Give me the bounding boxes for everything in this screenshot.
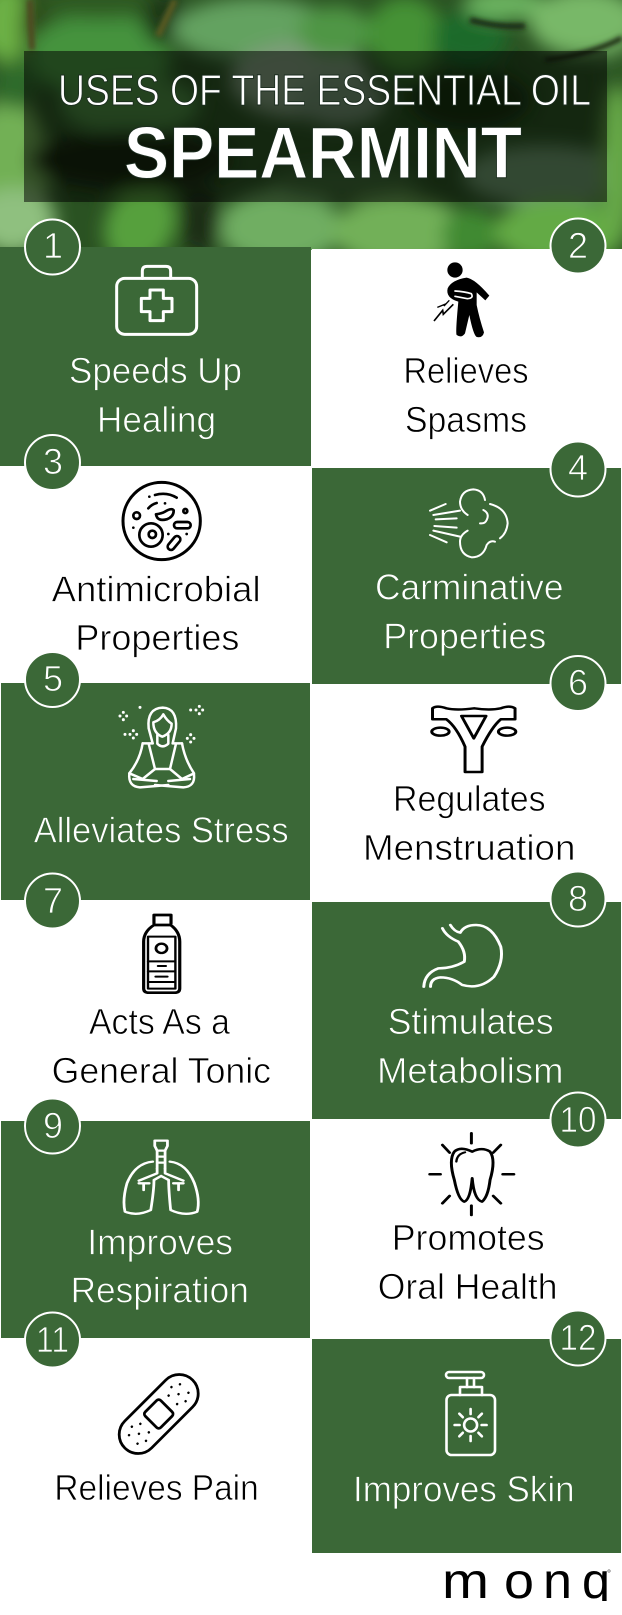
panel 9: improves respiration [1,1098,310,1338]
icon: gas cloud [430,489,508,557]
icon: tonic bottle [144,915,180,993]
label: Healing [97,399,216,440]
panel 4: carminative properties [312,442,621,684]
label: Promotes [392,1217,545,1258]
number badge 6 [550,656,606,711]
number badge 9: 9 [43,1105,63,1146]
number badge 8: 8 [568,878,588,919]
panel 6: regulates menstruation [312,656,622,902]
label: Oral Health [378,1266,558,1307]
label: General Tonic [52,1050,271,1091]
panel 3: antimicrobial properties [0,435,311,683]
icon: shining tooth [430,1133,514,1215]
label [52,569,261,658]
logo: monq: m [442,1553,489,1609]
panel background [312,468,621,684]
number badge 12: 12 [560,1317,596,1358]
label: Acts As a [89,1001,231,1042]
number badge 7: 7 [43,880,63,921]
label [363,778,575,868]
number badge 5 [25,652,80,707]
number badge 3 [25,435,80,490]
number badge 4: 4 [568,447,588,488]
icon: woman meditating [120,706,203,787]
panel 11: relieves pain [0,1312,311,1553]
panel background [312,1339,621,1553]
title panel: translucent dark box [24,51,607,202]
label: Properties [383,616,546,657]
label: Relieves Pain [54,1467,259,1508]
title line: spearmint: SPEARMINT [124,113,522,194]
panel 1: speeds up healing [0,220,311,466]
panel 10: promotes oral health [312,1092,622,1339]
label: Respiration [71,1270,249,1311]
panel background [312,902,621,1119]
label [404,350,528,440]
number badge 6: 6 [568,662,588,703]
number badge 11 [25,1312,80,1368]
label: Properties [75,617,239,658]
label [52,1001,271,1091]
panel background [0,466,311,683]
logo: monq: q [582,1553,610,1609]
number badge 10 [550,1092,606,1148]
header: spearmint leaves photo with title [0,0,622,250]
label: Alleviates Stress [34,810,289,851]
logo: monq [446,1570,610,1601]
label: Menstruation [363,827,575,868]
number badge 4 [550,442,606,496]
number badge 5: 5 [43,658,63,699]
label [69,350,242,440]
label: Improves Skin [353,1469,575,1510]
panel background [1,683,310,900]
number badge 9 [25,1098,80,1154]
label: Speeds Up [69,350,242,391]
number badge 1: 1 [43,225,63,266]
label: Antimicrobial [52,569,261,610]
icon: lungs [124,1141,198,1214]
label: Carminative [375,566,564,607]
panel background [1,1121,310,1338]
icon: uterus [432,707,516,772]
label [375,566,564,657]
number badge 12 [550,1310,606,1366]
label [377,1001,564,1091]
panel background [312,1119,622,1339]
label: Improves [87,1221,233,1262]
label: Relieves [404,350,528,391]
number badge 11: 11 [36,1319,69,1360]
icon: adhesive bandage [111,1367,206,1461]
panel 5: alleviates stress [1,652,310,900]
number badge 2: 2 [568,225,588,266]
panel background [0,1338,311,1553]
number badge 8 [550,872,606,926]
number badge 2 [550,218,606,274]
icon: sunscreen pump bottle [446,1372,495,1455]
panel background [0,247,311,466]
number badge 3: 3 [43,441,63,482]
label [378,1217,558,1307]
panel background [0,900,311,1121]
panel background [312,684,622,902]
number badge 7 [25,874,80,928]
panel 12: improves skin [312,1310,621,1553]
photo: blurred spearmint leaves [0,0,622,250]
panel 8: stimulates metabolism [312,872,621,1119]
label: Metabolism [377,1050,564,1091]
label: Spasms [405,399,527,440]
icon: person with cramp [434,262,489,337]
logo: monq: o [504,1553,534,1609]
panel 7: acts as a general tonic [0,874,311,1121]
icon: microbes in a petri dish [123,482,200,560]
panel background [312,249,622,468]
logo: monq: n [543,1553,572,1609]
number badge 1 [25,220,80,274]
icon: first aid kit [117,266,197,334]
panel 2: relieves spasms [312,218,622,468]
number badge 10: 10 [560,1099,596,1140]
label: Stimulates [388,1001,554,1042]
label [71,1221,249,1311]
icon: stomach [424,925,502,987]
label: Regulates [393,778,546,819]
